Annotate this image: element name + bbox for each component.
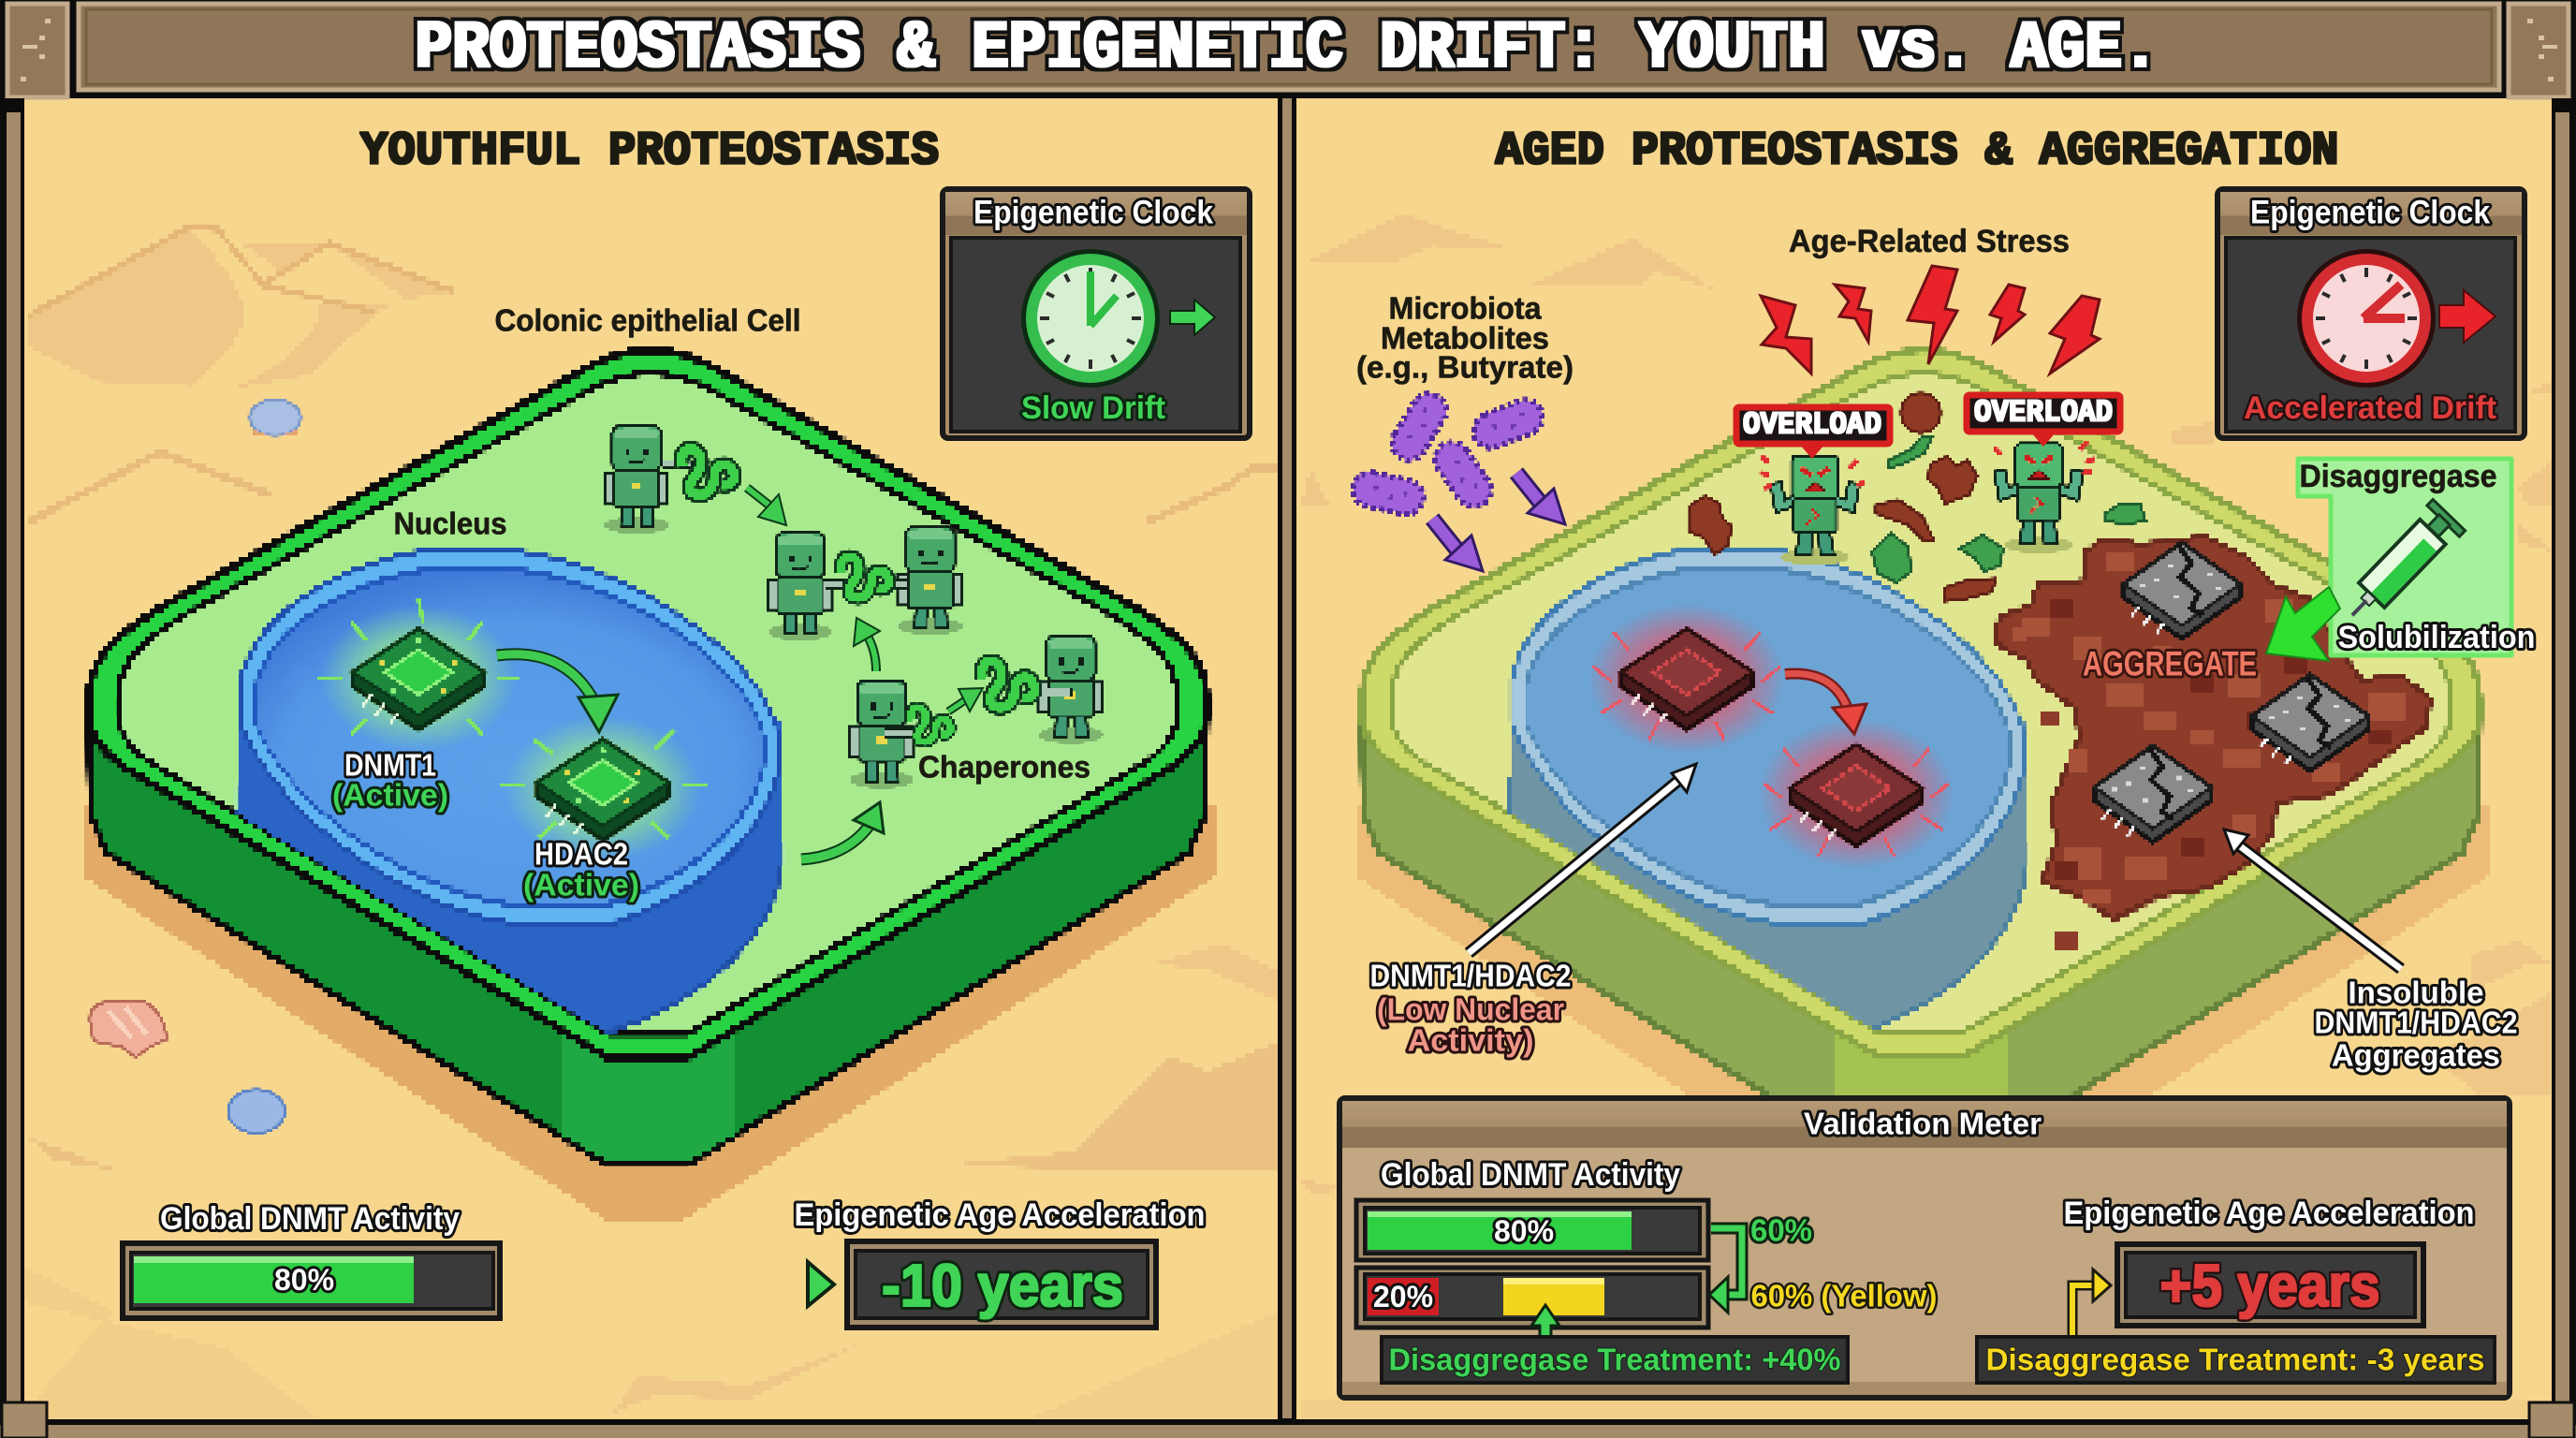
- readout: aged acceleration: [2063, 1196, 2475, 1326]
- overloaded chaperones and debris: [1690, 393, 2145, 601]
- label: microbiota metabolites: (e.g., Butyrate): [1356, 350, 1573, 384]
- label: 60% values: 60%: [1750, 1213, 1812, 1247]
- label: nucleus: Nucleus: [393, 506, 507, 541]
- nucleus aged: [1510, 549, 2027, 925]
- readout: epigenetic age acceleration: Epigenetic Age Acceleration: [794, 1197, 1206, 1233]
- label: 60% values: [1750, 1213, 1938, 1313]
- overload badges: [1736, 395, 2120, 459]
- label: insoluble aggregates: Aggregates: [2332, 1037, 2500, 1073]
- label: low nuclear activity: Activity): [1408, 1022, 1533, 1058]
- panel: youthful proteostasis: [19, 125, 1281, 1418]
- bracket arrow: [1709, 1228, 1742, 1313]
- arrow: DNMT1 to HDAC2: [497, 654, 618, 732]
- treatment box: +40%: Disaggregase Treatment: +40%: [1389, 1343, 1840, 1376]
- label: age-related stress: Age-Related Stress: [1789, 224, 2070, 259]
- colonic epithelial cell: [82, 350, 1216, 1221]
- heading: YOUTHFUL PROTEOSTASIS: [360, 125, 939, 178]
- panel: aged proteostasis and aggregation: [1301, 125, 2555, 1418]
- epigenetic clock: slow drift: [943, 189, 1250, 438]
- label: microbiota metabolites: Metabolites: [1381, 320, 1549, 356]
- label: HDAC2 active: HDAC2: [534, 837, 628, 871]
- readout: aged acceleration: +5 years: [2160, 1252, 2379, 1319]
- aged cell: [1357, 346, 2490, 1095]
- epigenetic clock: slow drift: Slow Drift: [1021, 390, 1165, 426]
- microbiota bacteria: [1350, 388, 1547, 518]
- up arrow: [1531, 1305, 1559, 1345]
- treatment box: -3 years: Disaggregase Treatment: -3 years: [1986, 1343, 2484, 1376]
- label: DNMT1 active: DNMT1: [344, 747, 436, 783]
- protein aggregate mass: [1995, 536, 2431, 948]
- frame: title banner: [0, 0, 2576, 98]
- stress lightning bolts: [1761, 266, 2100, 374]
- meter: global DNMT activity: [123, 1201, 500, 1318]
- arrow: red chip to chip: [1785, 674, 1866, 734]
- validation meter panel: Validation Meter: [1804, 1107, 2042, 1140]
- sand dunes left: [19, 227, 1281, 1418]
- label: insoluble aggregates: Insoluble: [2348, 976, 2484, 1009]
- enzyme chips DNMT1 and HDAC2: [318, 599, 707, 861]
- label: HDAC2 active: [523, 837, 639, 902]
- epigenetic clock: slow drift: Epigenetic Clock: [973, 195, 1213, 230]
- meter: global DNMT activity: 80%: [274, 1263, 334, 1297]
- readout: epigenetic age acceleration: [794, 1197, 1206, 1328]
- epigenetic clock: accelerated drift: [2217, 189, 2525, 438]
- label: insoluble aggregates: [2314, 976, 2518, 1073]
- validation meter panel: [1339, 1098, 2510, 1398]
- label: low nuclear activity: (Low Nuclear: [1377, 992, 1564, 1026]
- solubilization arrow: [2266, 587, 2340, 661]
- label: HDAC2 active: (Active): [523, 867, 639, 902]
- corner pillars: [7, 4, 2569, 97]
- label: microbiota metabolites: Microbiota: [1389, 290, 1542, 326]
- epigenetic clock: accelerated drift: Epigenetic Clock: [2250, 195, 2490, 230]
- overload badges: OVERLOAD: [1743, 408, 1881, 442]
- title: PROTEOSTASIS & EPIGENETIC DRIFT: YOUTH vs. AGE.: [416, 10, 2159, 87]
- label: chaperones: Chaperones: [918, 749, 1090, 785]
- label: solubilization: Solubilization: [2338, 620, 2535, 655]
- label: low nuclear activity: DNMT1/HDAC2: [1370, 959, 1571, 992]
- insoluble grey chips: [2095, 543, 2368, 842]
- label: colonic epithelial cell: Colonic epithelial Cell: [494, 303, 801, 337]
- sand dunes right: [1301, 213, 2555, 1418]
- readout: aged acceleration: Epigenetic Age Acceleration: [2063, 1196, 2475, 1231]
- heading: AGED PROTEOSTASIS & AGGREGATION: [1496, 125, 2338, 178]
- meter: global DNMT activity bars: [1356, 1157, 1708, 1328]
- meter: global DNMT activity bars: Global DNMT Activity: [1381, 1157, 1680, 1193]
- label: aggregate: AGGREGATE: [2083, 644, 2257, 683]
- white callout arrows: [1469, 764, 2401, 969]
- disaggregase panel with syringe: Disaggregase: [2299, 459, 2497, 494]
- meter: global DNMT activity bars: 80%: [1494, 1214, 1554, 1248]
- epigenetic clock: accelerated drift: Accelerated Drift: [2244, 390, 2496, 426]
- overload badges: OVERLOAD: [1974, 395, 2113, 431]
- label: DNMT1 active: (Active): [332, 777, 448, 813]
- label: low nuclear activity: [1370, 959, 1571, 1058]
- meter: global DNMT activity bars: 20%: [1373, 1280, 1433, 1313]
- pathway arrows: [747, 488, 983, 859]
- disaggregase panel with syringe: [2298, 459, 2511, 655]
- label: microbiota metabolites: [1356, 290, 1573, 384]
- purple arrows: [1432, 473, 1565, 571]
- readout: epigenetic age acceleration: -10 years: [882, 1252, 1123, 1319]
- low-activity enzyme chips: [1588, 604, 1954, 869]
- label: DNMT1 active: [332, 747, 448, 813]
- pebbles and shell: [90, 400, 300, 1133]
- nucleus: [239, 550, 782, 926]
- chaperone robots with proteins: [605, 426, 1103, 788]
- meter: global DNMT activity: Global DNMT Activity: [160, 1201, 460, 1237]
- yellow arrow: [2072, 1269, 2111, 1338]
- label: insoluble aggregates: DNMT1/HDAC2: [2314, 1005, 2518, 1039]
- label: 60% values: 60% (Yellow): [1750, 1279, 1938, 1313]
